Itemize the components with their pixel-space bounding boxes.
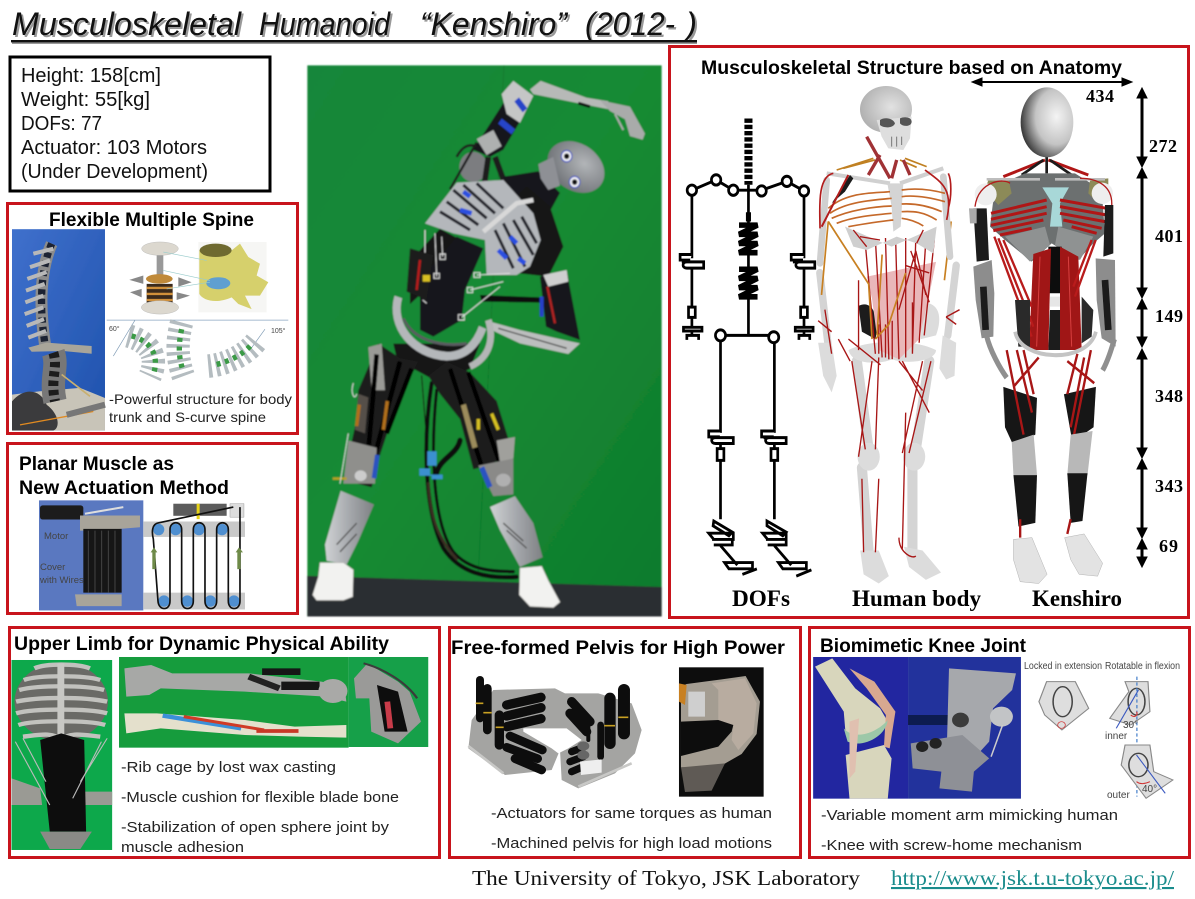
diagram labels: outer [1107,790,1130,801]
angle labels [109,325,286,335]
Kenshiro: back core [1048,247,1062,293]
specification box: Weight: 55[kg] [21,89,150,111]
footer: url: http://www.jsk.t.u-tokyo.ac.jp/ [891,866,1174,890]
diagram: knee cam rotations [1039,677,1173,798]
text: knee bullets [821,807,1118,854]
blue clip [419,451,443,479]
diagram labels: Rotatable in flexion [1105,661,1180,672]
Kenshiro: forearm ends [986,335,1114,378]
photo: planar muscle module [39,500,143,610]
human: abdominal muscles [867,262,936,359]
text: pelvis bullets: -Actuators for same torques as human [491,805,772,822]
figure labels [732,586,1122,611]
human: skull [860,86,912,150]
Kenshiro: red rib muscles [991,200,1107,235]
text: upper limb bullets: -Rib cage by lost wax casting [121,759,336,776]
human: sternum [887,183,903,232]
text: spine description: trunk and S-curve spine [109,409,266,425]
human: neck muscles [867,137,910,178]
title: Musculoskeletal [14,8,244,44]
dimension numbers: 401 [1155,226,1183,246]
dimension numbers: 348 [1155,386,1183,406]
lowered forearm and hand [470,320,580,367]
right leg [428,362,515,496]
human: pelvis shadow [859,304,877,339]
specification box: (Under Development) [21,161,208,183]
diagram labels: 40° [1142,784,1157,795]
photo labels [39,531,84,586]
photo labels: Motor [44,531,68,542]
figure labels: Kenshiro [1032,586,1122,611]
title: Humanoid [259,6,391,42]
title [11,6,699,44]
human: orange ribs [828,189,945,227]
abdomen wires [423,230,510,320]
dimension numbers: 434 [1086,86,1114,106]
text: knee bullets: -Variable moment arm mimicking human [821,807,1118,824]
dimension numbers: 69 [1159,536,1178,556]
dark back behind ribs [420,187,563,280]
heading: upper limb: Upper Limb for Dynamic Physical Ability [14,634,389,655]
title: “Kenshiro” [422,8,570,44]
Kenshiro: hip blocks [1015,297,1093,347]
text: knee bullets: -Knee with screw-home mechanism [821,837,1082,854]
panel: musculoskeletal structure [670,46,1188,618]
diagram labels: inner [1105,731,1128,742]
dimension numbers: 343 [1155,476,1183,496]
heading: knee: Biomimetic Knee Joint [820,636,1027,657]
Kenshiro model [969,87,1116,584]
figure labels: Human body [852,586,981,611]
shoulder ball [459,152,487,182]
photo: anatomical knee model [813,657,908,799]
height arrows [1137,88,1147,567]
human: hands and feet [818,302,956,584]
title: (2012- [585,6,675,42]
raised forearm and hand [530,81,645,140]
pelvis ring [397,297,483,356]
heading: planar muscle: Planar Muscle as [19,454,174,475]
rib cage [425,180,541,275]
dimension numbers [1086,86,1183,556]
diagram: spine joint and vertebra [107,242,288,376]
title: “Kenshiro” [420,6,568,42]
head [538,131,613,203]
photo: arm and shoulder [119,657,428,748]
diagram labels: Locked in extension [1024,661,1102,672]
Kenshiro: knees [1012,431,1093,475]
trailing cables [422,376,517,577]
human: lower rib bones [845,227,937,253]
panel: pelvis [450,628,800,858]
DOF stick figure [680,119,815,576]
shoes [313,563,560,607]
human: clavicles [827,168,943,183]
photo: spine on blue background [12,229,105,431]
diagram: muscle wire path [143,504,245,609]
heading: pelvis: Free-formed Pelvis for High Power [451,638,786,659]
photo: knee mechanism [908,657,1021,799]
human: lower limbs bones [820,266,956,552]
shin covers [325,491,543,567]
specification box [10,57,270,191]
photo labels: Cover [40,562,65,573]
photo: rib cage and muscles [11,660,112,850]
pelvis model [468,680,642,788]
Kenshiro: lower legs [1013,473,1088,527]
black forearm support bar [480,295,540,303]
Kenshiro: shoes [1013,534,1103,584]
Kenshiro: thighs [1003,350,1096,446]
photo: machined pelvis [679,667,764,797]
raised upper arm [450,81,533,196]
Kenshiro: sternum [1042,187,1069,227]
diagram labels: 30° [1123,720,1138,731]
Kenshiro: red lower muscles [1029,248,1051,350]
human: deltoid muscles [820,170,951,228]
text: spine description [109,391,292,425]
joint symbols: arms [680,255,704,268]
text: upper limb bullets: -Stabilization of open sphere joint by [121,819,390,836]
black abdomen [420,237,483,337]
black motor block on arm [540,270,580,340]
panel: flexible multiple spine [8,204,298,434]
title: ) [684,8,699,44]
dimension numbers: 272 [1149,136,1177,156]
heading: planar muscle: New Actuation Method [19,478,229,499]
title: (2012- [587,8,677,44]
Kenshiro: lower ribs [1005,227,1093,262]
specification box: Actuator: 103 Motors [21,137,207,159]
specification box: DOFs: 77 [21,113,102,135]
heading: planar muscle [19,454,229,499]
Kenshiro: left arm [969,208,994,338]
text: upper limb bullets: muscle adhesion [121,839,244,856]
text: spine description: -Powerful structure for body [109,391,292,407]
text: pelvis bullets [491,805,772,852]
joint symbols: legs [709,431,733,443]
diagram labels [1024,661,1180,801]
waist motors [407,248,433,300]
width arrow [972,78,1132,86]
panel: upper limb [10,628,440,858]
title: Musculoskeletal [12,6,242,42]
Kenshiro: neck muscles [1003,157,1088,177]
center photo: Kenshiro robot [307,65,662,616]
figure labels: DOFs [732,586,790,611]
spine coil [739,212,758,297]
footer: affiliation: The University of Tokyo, JSK Laboratory [472,866,861,890]
Kenshiro: shoulders [975,178,1113,207]
heading: musculoskeletal structure: Musculoskeletal Structure based on Anatomy [701,58,1122,79]
specification box: Height: 158[cm] [21,65,161,87]
neck [503,171,560,214]
dark back and hip area [393,229,480,383]
Kenshiro: pelvis ring [1015,332,1096,355]
Kenshiro: head [1021,87,1073,157]
angle labels: 105° [271,327,286,335]
panel: planar muscle [8,444,298,614]
human: arm bones [820,177,950,263]
dimension numbers: 149 [1155,306,1183,326]
text: upper limb bullets [121,759,399,856]
left leg [333,344,418,487]
angle labels: 60° [109,325,120,333]
panel: knee [810,628,1190,858]
title: Humanoid [261,8,393,44]
text: upper limb bullets: -Muscle cushion for flexible blade bone [121,789,399,806]
Kenshiro: right arm [1096,205,1116,347]
Kenshiro: rib cage [990,173,1105,262]
title: ) [682,6,697,42]
heading: flexible multiple spine: Flexible Multiple Spine [49,210,254,231]
photo labels: with Wires [39,575,84,586]
human body model [818,86,960,584]
text: pelvis bullets: -Machined pelvis for high load motions [491,835,772,852]
human: trapezius [837,158,927,170]
